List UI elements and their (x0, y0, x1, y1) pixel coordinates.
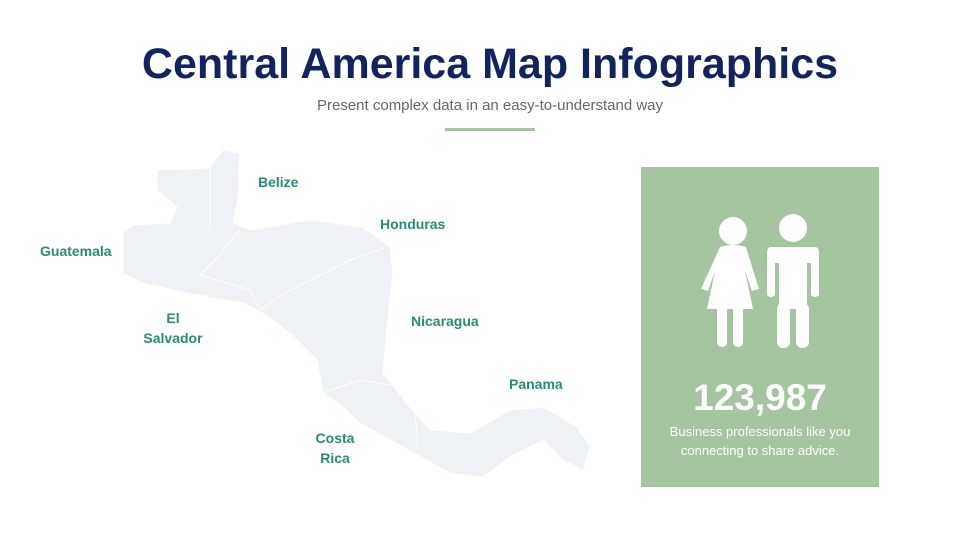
label: Costa Rica: Costa (316, 430, 354, 446)
icon: people (701, 214, 819, 348)
label: Belize: Belize (258, 174, 298, 190)
label: El Salvador (143, 310, 203, 346)
stat description: Business professionals like you (670, 424, 850, 439)
panel: stats (641, 167, 879, 487)
label: El Salvador: Salvador (143, 330, 203, 346)
subtitle: Present complex data in an easy-to-understand way (317, 97, 663, 114)
stat description (670, 424, 850, 458)
label: Guatemala: Guatemala (40, 243, 112, 259)
label: Honduras: Honduras (380, 216, 445, 232)
stat description: connecting to share advice. (681, 443, 839, 458)
title: Central America Map Infographics (142, 40, 838, 88)
label: Costa Rica (316, 430, 354, 466)
divider accent (445, 128, 535, 131)
label: Panama: Panama (509, 376, 563, 392)
label: Costa Rica: Rica (320, 450, 350, 466)
label: El Salvador: El (166, 310, 180, 326)
label: Nicaragua: Nicaragua (411, 313, 479, 329)
stat number: 123,987 (693, 377, 827, 418)
